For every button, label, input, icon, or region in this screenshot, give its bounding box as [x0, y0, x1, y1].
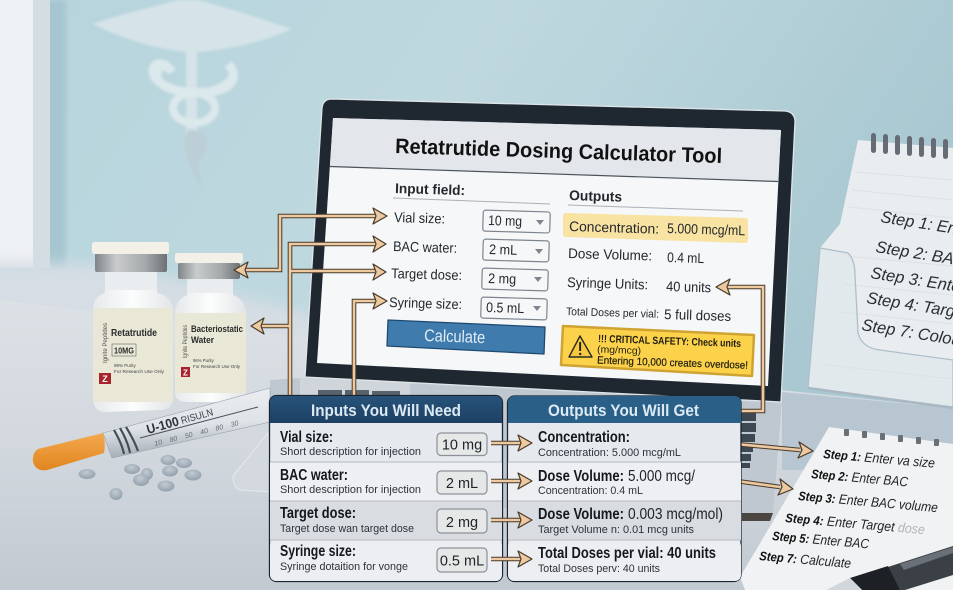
vial: Bacteriostatic Water: Water [191, 335, 214, 345]
concentration highlight [566, 216, 745, 240]
orange needle cap [33, 433, 105, 470]
row: dose volume: 5.000 mcg/ [628, 468, 695, 485]
syringe: RISULN [180, 407, 215, 427]
notepad rings [844, 429, 939, 446]
outputs column: Outputs [569, 187, 623, 205]
row: vial size: 10 mg [442, 438, 482, 454]
arrow: bacteriostatic water to BAC water and target dose [251, 236, 386, 398]
row: target dose: Target dose wan target dose [280, 523, 414, 535]
row: BAC water: 2 mL [446, 476, 478, 492]
front notepad with steps [740, 427, 953, 590]
row: concentration [538, 429, 681, 459]
step list [759, 446, 939, 571]
arrow: vial size row [491, 435, 532, 451]
outputs column [566, 187, 746, 324]
arrow: syringe size row [491, 551, 532, 567]
critical safety warning box [561, 326, 754, 376]
screen body [317, 118, 781, 386]
vial: Bacteriostatic Water: Ignite Peptides [183, 325, 189, 358]
acrylic holder [808, 248, 953, 407]
step list: Step 3: Enter BAC volume [798, 488, 939, 515]
outputs column: 0.4 mL [667, 249, 705, 266]
step list: Step 5: Enter BAC [772, 528, 870, 551]
syringe: U-100 [145, 413, 181, 437]
input fields column: Vial size: [394, 209, 445, 227]
row: vial size [280, 429, 487, 458]
row: concentration: Concentration: 5.000 mcg/mL [538, 447, 681, 459]
icon: caduceus wall emblem [93, 0, 291, 192]
arrow: outputs panel to syringe units [716, 279, 763, 411]
laptop base and keyboard [233, 378, 782, 521]
input fields column: BAC water: [393, 238, 457, 256]
step list: Step 1: Enter va size [823, 446, 936, 471]
row: dose volume [538, 468, 695, 497]
wall background [0, 0, 953, 420]
panel heading [508, 396, 741, 423]
critical safety warning box: !!! CRITICAL SAFETY: Check units [598, 333, 741, 350]
row: dose volume detail: 0.003 mcg/mol) [628, 506, 723, 523]
row: concentration: Concentration: [538, 429, 630, 446]
row: total doses [538, 545, 716, 575]
keyboard keys [741, 413, 756, 468]
scale line [140, 407, 258, 438]
row: dose volume detail [538, 506, 723, 536]
dropdown selects: 2 mg [488, 270, 516, 287]
vial: Bacteriostatic Water [175, 253, 246, 402]
outputs column: 40 units [666, 278, 711, 295]
input fields column: Input field: [395, 180, 465, 198]
icon: brand logo [181, 367, 190, 378]
critical safety warning box: (mg/mcg) [597, 345, 641, 357]
screen header band [330, 118, 781, 181]
syringe [33, 388, 270, 470]
plunger collar bands [114, 427, 138, 454]
row: vial size: Vial size: [280, 429, 333, 446]
arrow: inputs panel to syringe size [354, 293, 387, 398]
row: dose volume detail: Target Volume n: 0.01 mcg units [538, 524, 694, 536]
panel: inputs you will need [270, 396, 502, 582]
vial: Retatrutide: 99% Purity [114, 363, 137, 368]
step list: Step 7: Calculate [759, 548, 852, 571]
white column at left [0, 0, 66, 270]
pills [78, 455, 202, 500]
vial: Retatrutide: Ignite Peptides [102, 322, 109, 363]
vial: Retatrutide: For Research Use Only [114, 369, 165, 375]
outputs column: Total Doses per vial: [566, 306, 659, 321]
row: vial size: Short description for injection [280, 446, 421, 458]
icon: brand logo: Z [102, 374, 108, 384]
icon: brand logo: Z [183, 368, 188, 378]
calculate button: Calculate [424, 326, 485, 347]
syringe: 10 80 50 40 80 30 [154, 420, 239, 448]
dropdown selects: 10 mg [488, 212, 522, 229]
row: target dose: Target dose: [280, 505, 356, 522]
label [175, 313, 246, 393]
outputs column: 5 full doses [664, 306, 731, 324]
row: dose volume: Concentration: 0.4 mL [538, 485, 643, 497]
panel heading [270, 396, 502, 423]
laptop screen [305, 99, 795, 402]
vial: Retatrutide: Retatrutide [111, 328, 157, 339]
icon: warning triangle [569, 336, 592, 357]
row: syringe size: 0.5 mL [440, 554, 484, 570]
row: syringe size [280, 543, 487, 573]
bezel [305, 99, 795, 402]
row: BAC water [280, 467, 487, 496]
input fields column [387, 180, 550, 354]
vial: Retatrutide: 10MG [114, 346, 134, 356]
arrow: dose volume to step 3 [715, 478, 793, 495]
pen [826, 546, 953, 590]
label [93, 308, 173, 402]
dropdown selects: 2 mL [489, 241, 518, 258]
row: total doses: Total Doses per vial: 40 units [538, 545, 716, 562]
input fields column: Syringe size: [389, 294, 462, 312]
vial: Retatrutide [92, 242, 173, 412]
back spiral notepad in acrylic holder [808, 133, 953, 408]
row: dose volume: Dose Volume: [538, 468, 624, 485]
outputs column: 5.000 mcg/mL [667, 220, 746, 238]
row: dose volume detail: Dose Volume: [538, 506, 624, 523]
critical safety warning box: Entering 10,000 creates overdose! [597, 355, 748, 372]
icon: brand logo [99, 373, 111, 384]
row: syringe size: Syringe size: [280, 543, 356, 560]
arrow: target dose row [491, 512, 532, 528]
dropdown selects [481, 210, 550, 320]
rows shading [508, 462, 741, 581]
desk surface [0, 262, 953, 590]
title: Retatrutide Dosing Calculator Tool [395, 135, 722, 168]
panel heading: Outputs You Will Get [548, 402, 699, 420]
step list: Step 2: Enter BAC [811, 466, 909, 489]
calculate button [387, 320, 545, 354]
vial: Bacteriostatic Water: 96% Purity [193, 358, 215, 363]
step list: Step 4: Enter Target dose [785, 510, 926, 537]
outputs column: Dose Volume: [568, 245, 652, 263]
input fields column: Target dose: [391, 265, 462, 283]
handwritten steps [860, 208, 953, 351]
row: BAC water: Short description for injection [280, 484, 421, 496]
dropdown selects: 0.5 mL [486, 299, 525, 316]
panel heading: Inputs You Will Need [311, 402, 461, 420]
row: BAC water: BAC water: [280, 467, 348, 484]
arrow: BAC water row [491, 473, 532, 489]
vial: Bacteriostatic Water: Bacteriostatic [191, 324, 243, 334]
notepad spiral rings [871, 133, 948, 159]
outputs column: Concentration: [569, 218, 659, 237]
vial: Bacteriostatic Water: For Research Use Only [193, 364, 241, 369]
outputs column: Syringe Units: [567, 274, 648, 292]
arrow: concentration to step 1 [715, 442, 813, 458]
rows shading [270, 462, 502, 581]
row: target dose: 2 mg [446, 515, 478, 531]
row: target dose [280, 505, 487, 535]
row: syringe size: Syringe dotaition for vonge [280, 561, 408, 573]
arrow: vial cap to vial size [234, 208, 387, 278]
row: total doses: Total Doses perv: 40 units [538, 563, 660, 575]
panel: outputs you will get [508, 396, 741, 582]
